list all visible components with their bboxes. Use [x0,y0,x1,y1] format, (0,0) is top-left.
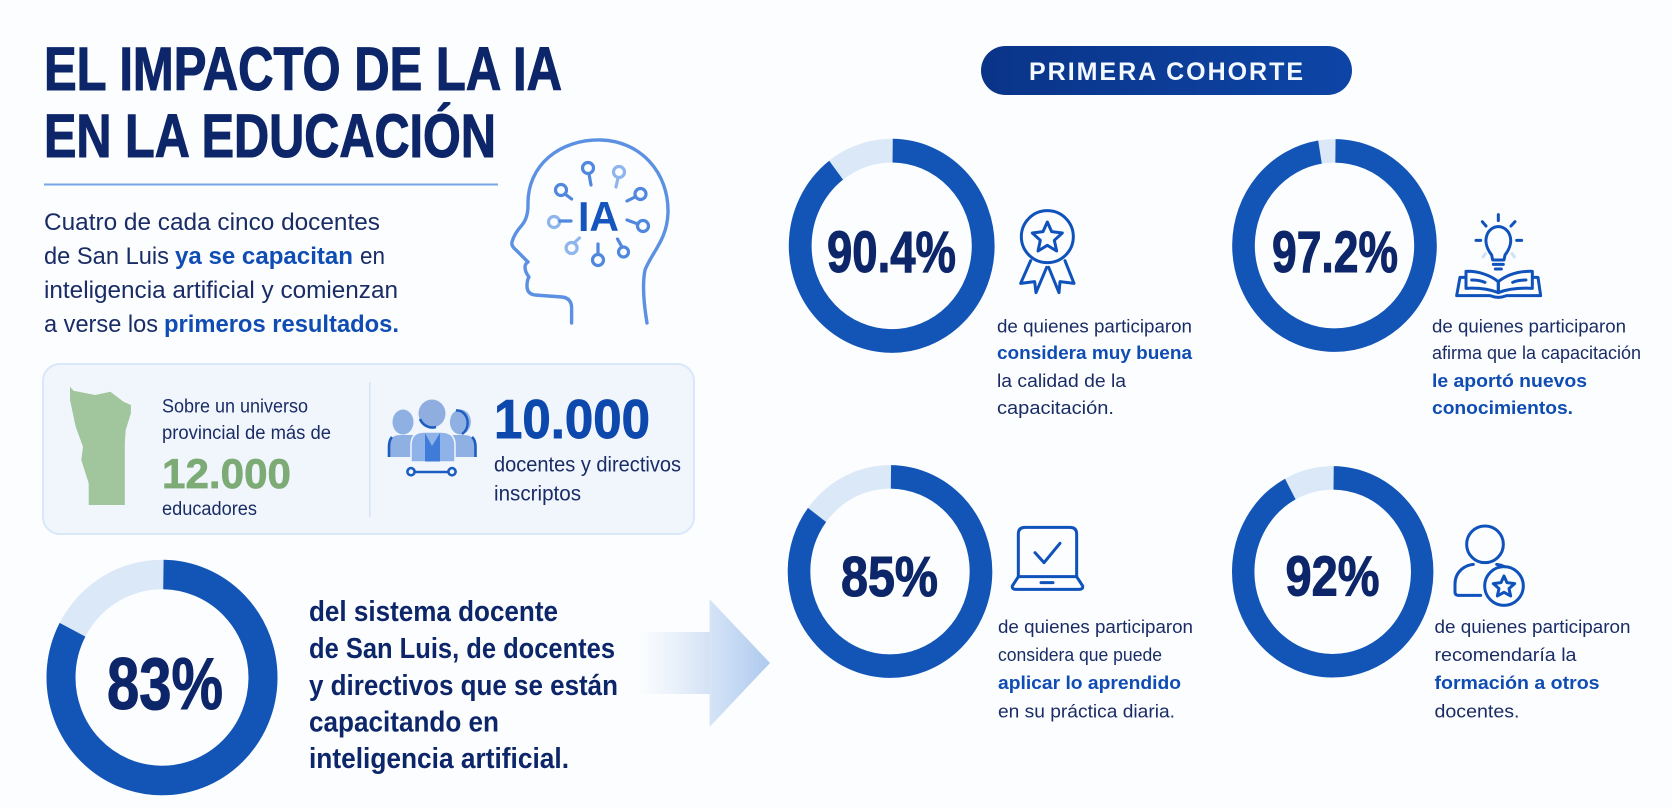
icon: head with IA circuit [512,140,668,323]
heading pill: primera cohorte: PRIMERA COHORTE [1029,58,1303,86]
donut chart [1242,477,1423,667]
83% description: capacitando en [309,706,499,738]
caption: considera que puede [998,645,1162,665]
caption: docentes. [1434,702,1520,722]
caption: conocimientos. [1432,398,1573,418]
caption: considera muy buena [997,343,1193,363]
stat: 85% [798,476,1193,722]
arrow [638,599,770,727]
caption: la calidad de la [997,371,1127,391]
icon: laptop with check [1012,527,1083,589]
educators text: educadores [162,499,257,520]
83% description: del sistema docente [309,596,558,628]
caption: en su práctica diaria. [998,702,1175,722]
icon: medal [1021,211,1074,293]
83% description [309,596,618,775]
intro text [44,209,399,338]
intro text: Cuatro de cada cinco docentes [44,209,380,236]
stat: 90.4% [799,150,1193,418]
educators text: Sobre un universo [162,396,308,418]
caption: de quienes participaron [1434,617,1630,637]
caption: afirma que la capacitación [1432,343,1641,363]
donut chart [798,476,982,667]
icon: group of teachers [389,400,476,475]
caption [1434,617,1630,722]
heading pill: primera cohorte [981,46,1352,95]
intro text: de San Luis [44,243,169,270]
caption [997,316,1193,418]
panel: universe of educators [43,364,694,534]
83% description: y directivos que se están [309,670,618,702]
title: EL IMPACTO DE LA IA [44,35,562,103]
caption: recomendaría la [1434,645,1578,665]
stat: 92%: 92% [1286,545,1380,609]
icon: San Luis province map [70,387,131,505]
intro text: en [360,243,385,270]
donut chart: 83%: 83% [107,644,223,725]
caption: le aportó nuevos [1432,371,1587,391]
educators text: provincial de más de [162,423,331,444]
83% description: de San Luis, de docentes [309,633,615,665]
title: EN LA EDUCACIÓN [44,102,496,170]
caption: capacitación. [997,398,1114,418]
icon: book with light bulb [1457,215,1541,297]
donut chart: 83% [60,573,264,782]
stat: 92% [1242,477,1630,722]
icon: user with star [1455,526,1523,605]
caption: aplicar lo aprendido [998,673,1181,693]
icon: head with IA circuit: IA [578,193,619,240]
enrolled text: docentes y directivos [494,454,681,476]
intro text: inteligencia artificial y comienzan [44,277,398,304]
title [44,35,562,170]
educators text: 12.000 [162,450,291,497]
donut chart [1243,150,1426,341]
caption: de quienes participaron [997,316,1192,336]
caption: formación a otros [1434,673,1600,693]
enrolled text [494,388,681,506]
enrolled text: 10.000 [494,388,650,450]
intro text: a verse los [44,311,158,338]
intro text: ya se capacitan [175,243,353,270]
stat: 97.2%: 97.2% [1272,220,1398,285]
educators text [162,396,331,520]
caption: de quienes participaron [1432,316,1626,336]
caption [1432,316,1641,418]
stat: 97.2% [1243,150,1641,418]
donut chart [799,150,984,342]
caption [998,617,1193,722]
enrolled text: inscriptos [494,482,581,506]
stat: 85%: 85% [841,545,938,609]
stat: 90.4%: 90.4% [827,220,956,285]
83% description: inteligencia artificial. [309,743,569,775]
caption: de quienes participaron [998,617,1193,637]
intro text: primeros resultados. [164,311,399,338]
